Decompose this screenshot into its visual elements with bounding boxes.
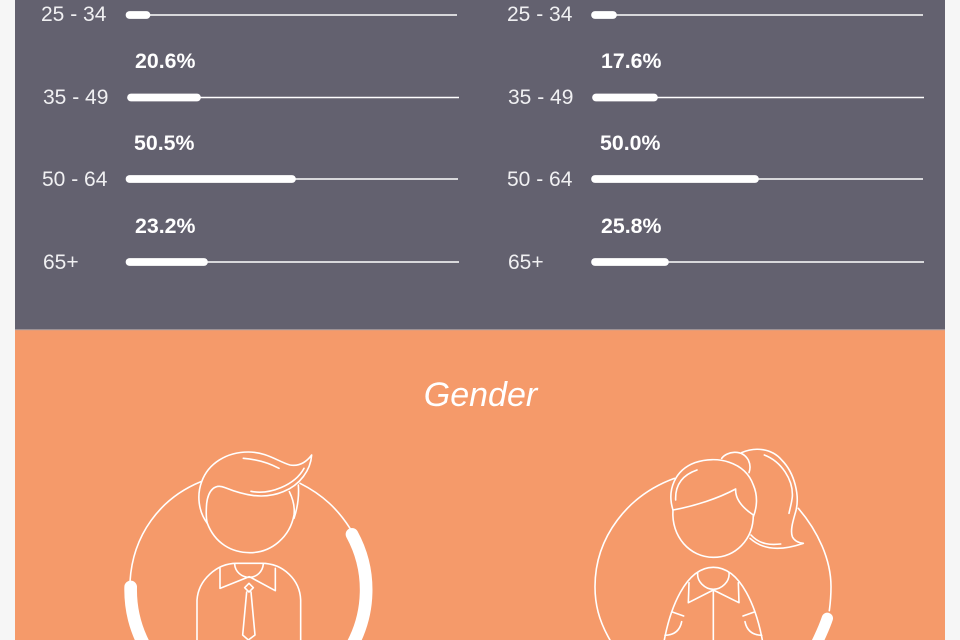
chart: left age bars [41,3,459,274]
row 35-49 left [43,49,459,109]
row 65+ left [43,214,459,274]
row 65+ left: 65+ [43,251,79,274]
row 25-34 left: 25 - 34 [41,3,107,26]
row 65+ right: 65+ [508,251,544,274]
row 25-34 right: 25 - 34 [507,3,573,26]
ring thin arc [595,478,831,640]
tie [243,583,255,640]
row 65+ right [508,214,924,274]
panel: gender background [15,330,945,640]
row 35-49 left: 20.6% [135,49,195,73]
row 35-49 right: 35 - 49 [508,86,573,109]
row 35-49 right: 17.6% [601,49,661,73]
row 50-64 left [42,131,458,191]
row 50-64 right [507,131,923,191]
row 65+ left: 23.2% [135,214,195,238]
ring thick arc [815,618,827,640]
chart: right age bars [507,3,924,274]
torso [664,567,762,640]
face [207,492,294,553]
row 50-64 left: 50.5% [134,131,194,155]
hair [199,452,312,523]
row 35-49 left: 35 - 49 [43,86,108,109]
icon: man with ring [130,452,366,640]
row 50-64 right: 50.0% [600,131,660,155]
heading: Gender: Gender [424,376,539,414]
panel: age chart background [15,0,945,330]
row 50-64 right: 50 - 64 [507,168,573,191]
face [673,510,753,557]
pockets [665,612,762,635]
hair bun and ponytail [722,449,803,548]
collar [220,564,275,591]
ring thin arc [130,482,350,582]
collar [688,573,739,640]
row 65+ right: 25.8% [601,214,661,238]
hair [671,460,756,517]
row 50-64 left: 50 - 64 [42,168,108,191]
icon: woman with ring [595,449,831,640]
row 35-49 right [508,49,924,109]
ring thick arcs [131,534,366,640]
torso [197,563,301,640]
